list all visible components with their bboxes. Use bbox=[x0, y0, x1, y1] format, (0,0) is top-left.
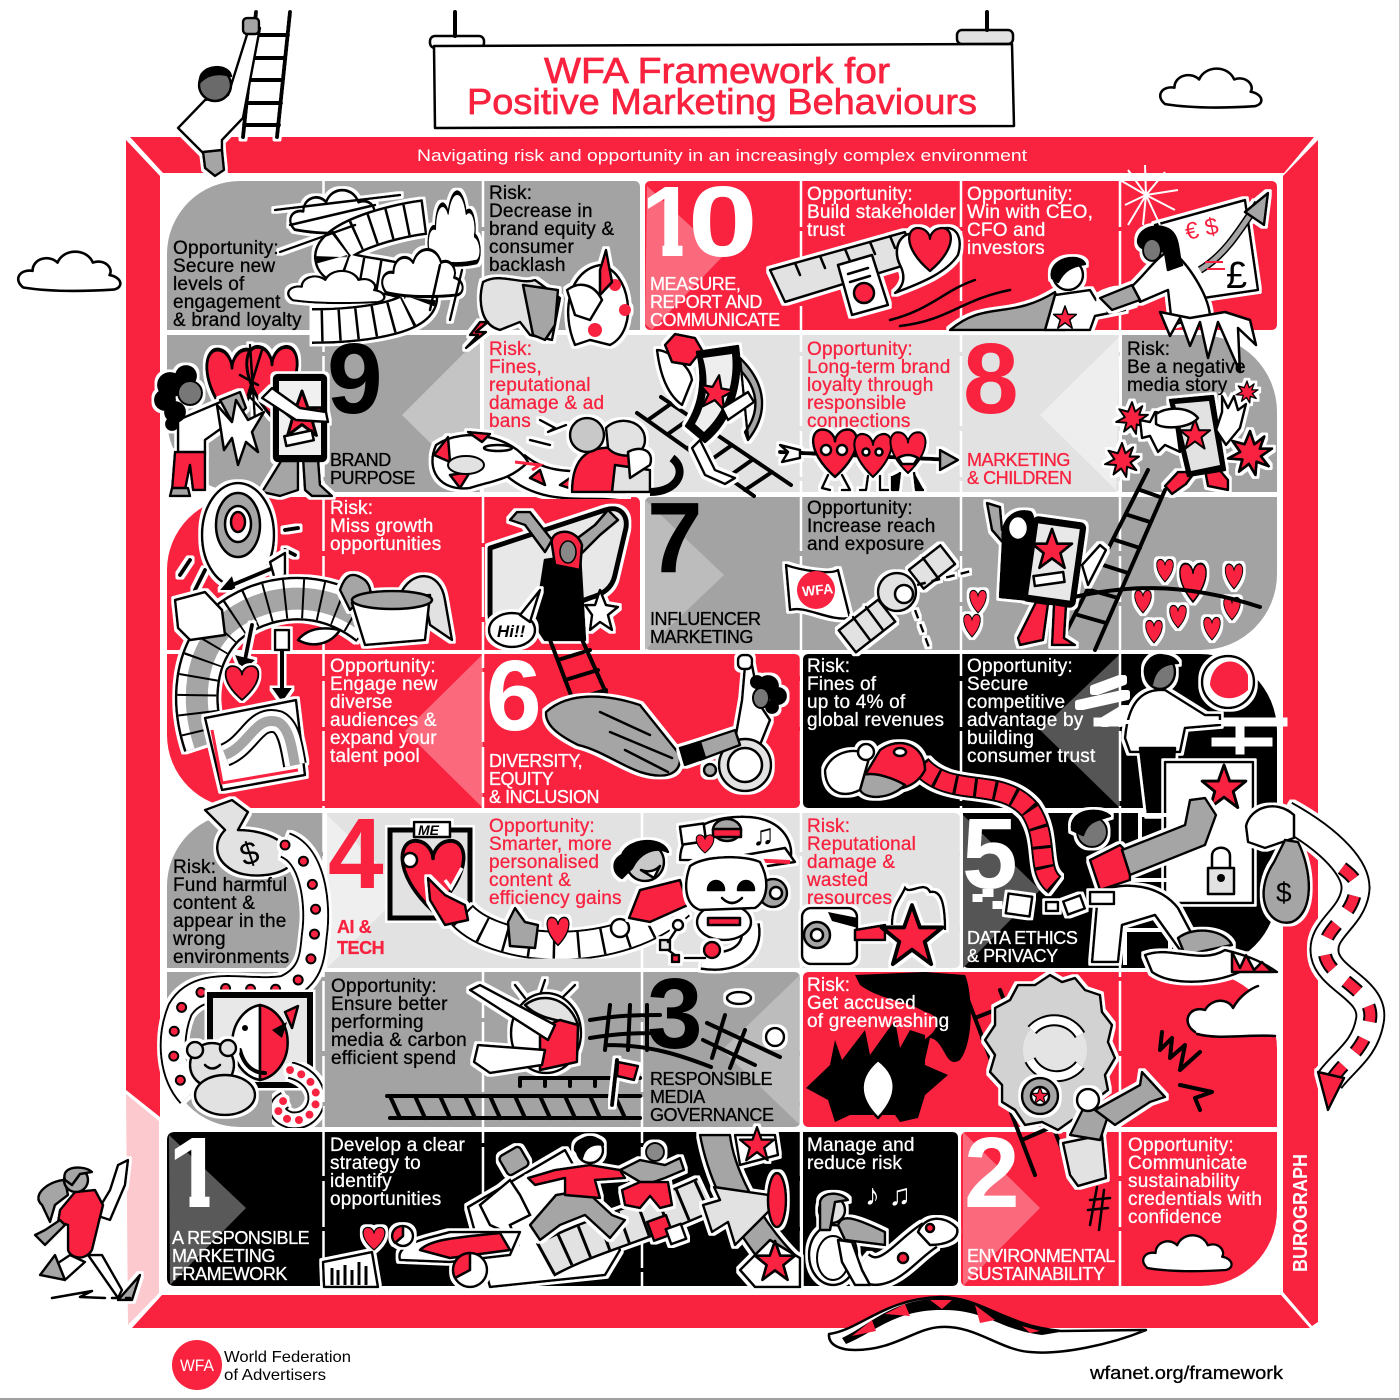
illustration: globe runner bbox=[470, 980, 581, 1073]
illustration: woman with finance chart bbox=[1100, 193, 1268, 325]
text block: Risk harmful content: appear in the bbox=[173, 911, 287, 932]
label: step 6: DIVERSITY, bbox=[489, 751, 582, 771]
text block: Risk fines revenues: Risk: bbox=[807, 656, 850, 677]
illustration: thought bubble with interests bbox=[680, 817, 795, 868]
logo: WFA: WFA bbox=[180, 1356, 215, 1375]
frame: red board border bbox=[126, 137, 1318, 1328]
url: wfanet.org/framework bbox=[1089, 1363, 1284, 1383]
icon: heart next to tube bbox=[226, 666, 258, 700]
text block: Opportunity brand loyalty: Opportunity: bbox=[173, 238, 279, 259]
logo: WFA bbox=[172, 1340, 351, 1390]
text block: Risk fines: Risk: bbox=[489, 339, 532, 360]
icon: finish flag bbox=[612, 1060, 638, 1105]
text block: Risk negative media: Be a negative bbox=[1127, 357, 1246, 378]
illustration: rocket board bbox=[468, 1145, 705, 1287]
illustration: arrow missing target bbox=[220, 553, 285, 590]
text block: Opportunity personalised content: Smarter, more bbox=[489, 834, 612, 855]
text block: Risk brand equity: Risk: bbox=[489, 183, 532, 204]
illustration: woman with finance chart: £ bbox=[1226, 255, 1247, 297]
text block: Risk negative media: media story bbox=[1127, 375, 1228, 396]
illustration: winding ladder road and clouds bbox=[275, 190, 480, 326]
panel: row 1 grey bbox=[167, 181, 640, 330]
panel: row 4 red bbox=[167, 654, 800, 808]
panel: row 6 red bbox=[803, 972, 1277, 1127]
icon: firework bbox=[1120, 165, 1178, 225]
text block: Opportunity media carbon: efficient spend bbox=[331, 1048, 456, 1069]
illustration: white burst under finance woman bbox=[1160, 312, 1256, 372]
text block: Risk brand equity: consumer bbox=[489, 237, 574, 258]
illustration: bottom snake bbox=[829, 1297, 1146, 1353]
text block: Opportunity brand loyalty: engagement bbox=[173, 292, 281, 313]
label: step 7: MARKETING bbox=[650, 627, 753, 647]
illustration: burst bbox=[217, 400, 264, 465]
label: step 2: ENVIRONMENTAL bbox=[967, 1246, 1115, 1266]
illustration: data icons bbox=[975, 892, 1114, 917]
text block: Opportunity diverse audiences: diverse bbox=[330, 692, 393, 713]
illustration: man at lectern with sun bbox=[1080, 655, 1285, 815]
text block: Opportunity long-term loyalty: Long-term brand bbox=[807, 357, 950, 378]
text block: Opportunity competitive advantage: consumer trust bbox=[967, 746, 1096, 767]
label: step 4: AI & bbox=[337, 917, 372, 937]
illustration: finish net bbox=[590, 1005, 780, 1068]
text block: Opportunity CEO: Win with CEO, bbox=[967, 202, 1093, 223]
icon: ground scribble bbox=[52, 1291, 130, 1298]
text block: Risk negative media: Risk: bbox=[1127, 339, 1170, 360]
label: step 2: SUSTAINABILITY bbox=[967, 1264, 1105, 1284]
illustration: thought bubble with interests: ♫ bbox=[752, 819, 774, 852]
text block: Opportunity long-term loyalty: connections bbox=[807, 411, 911, 432]
text block: Opportunity media carbon: Ensure better bbox=[331, 994, 448, 1015]
illustration: target bbox=[180, 483, 298, 590]
illustration: step ladder under man bbox=[1125, 815, 1178, 965]
text block: Risk fines: Fines, bbox=[489, 357, 542, 378]
label: step 5: DATA ETHICS bbox=[967, 928, 1078, 948]
illustration: award rosette bbox=[1022, 1078, 1058, 1114]
panel: row 5 grey bbox=[167, 813, 323, 968]
numerals: 1 bbox=[168, 1117, 224, 1229]
illustration: running track bbox=[387, 1078, 640, 1118]
panel: row 2 grey left bbox=[167, 335, 480, 492]
text block: Opportunity personalised content: personalised bbox=[489, 852, 599, 873]
illustration: ladder under cupid bbox=[637, 397, 791, 496]
text block: Opportunity stakeholder trust: trust bbox=[807, 220, 845, 241]
text block: Opportunity competitive advantage: Secure bbox=[967, 674, 1028, 695]
illustration: woman with broken heart bbox=[154, 365, 246, 496]
illustration: businessman with cape and handshake bbox=[950, 258, 1134, 330]
title banner bbox=[430, 12, 1014, 128]
illustration: line chart bbox=[205, 700, 305, 790]
text block: Manage risk: reduce risk bbox=[807, 1153, 902, 1174]
illustration: snake tail bbox=[650, 458, 680, 492]
illustration: leaf bbox=[298, 628, 340, 644]
panel: row 3 grey bbox=[645, 497, 1277, 650]
text block: Risk fines revenues: up to 4% of bbox=[807, 692, 906, 713]
banner rolls bbox=[430, 12, 1013, 48]
numerals: 6 bbox=[486, 640, 542, 752]
text block: Opportunity long-term loyalty: loyalty through bbox=[807, 375, 934, 396]
logo: WFA: of Advertisers bbox=[224, 1367, 326, 1384]
panel: row 2 grey right bbox=[1122, 335, 1277, 492]
text block: Opportunity reach: Increase reach bbox=[807, 516, 935, 537]
label: step 1: FRAMEWORK bbox=[172, 1264, 287, 1284]
text block: Risk growth: opportunities bbox=[330, 534, 441, 555]
text block: Opportunity competitive advantage: competitive bbox=[967, 692, 1065, 713]
illustration: white snake with money bag bbox=[1246, 806, 1370, 1110]
illustration: big arrow and stars bbox=[700, 1127, 800, 1287]
illustration: framed heart ME bbox=[390, 822, 470, 918]
text block: Opportunity media carbon: media & carbon bbox=[331, 1030, 467, 1051]
illustration: smiling woman bbox=[614, 841, 688, 922]
illustration: arrows into chart bbox=[235, 625, 292, 702]
panel: row 5 black bbox=[963, 813, 1277, 968]
subtitle: Navigating risk and opportunity in an increasingly complex environment bbox=[417, 146, 1027, 165]
numerals: 7 bbox=[647, 482, 703, 594]
icon: cloud top right bbox=[1160, 69, 1261, 108]
text block: Opportunity CEO: investors bbox=[967, 238, 1045, 259]
text block: Risk fines revenues: Fines of bbox=[807, 674, 877, 695]
illustration: leaf and flower bbox=[727, 992, 784, 1046]
text block: Opportunity CEO: CFO and bbox=[967, 220, 1046, 241]
numeral 10 bbox=[648, 186, 752, 257]
text block: Opportunity long-term loyalty: responsible bbox=[807, 393, 906, 414]
label: step 10: REPORT AND bbox=[650, 292, 762, 312]
numerals: 4 bbox=[328, 798, 384, 910]
text block: Risk fines: damage & ad bbox=[489, 393, 604, 414]
text block: Opportunity long-term loyalty: Opportunity: bbox=[807, 339, 913, 360]
panel: row 7 black bbox=[167, 1132, 800, 1286]
illustration: influencer with phone character bbox=[987, 503, 1106, 645]
numerals: 9 bbox=[327, 323, 383, 435]
text block: Opportunity stakeholder trust: Build stakeholder bbox=[807, 202, 957, 223]
illustration: woman in hijab and tablet bbox=[490, 509, 626, 640]
illustration: mother hugging child bbox=[530, 418, 651, 492]
illustration: WFA flag: WFA bbox=[801, 580, 834, 599]
title text: Positive Marketing Behaviours bbox=[467, 81, 977, 122]
illustration: ruler and report bbox=[770, 228, 960, 315]
label: step 4: TECH bbox=[337, 938, 384, 958]
numerals: 2 bbox=[964, 1117, 1020, 1229]
illustration: friendly robot bbox=[686, 857, 787, 961]
title text: WFA Framework for bbox=[544, 50, 890, 91]
panel: row 7 red bbox=[961, 1132, 1277, 1286]
label: step 8: & CHILDREN bbox=[967, 468, 1072, 488]
text block: Opportunity diverse audiences: Opportunity: bbox=[330, 656, 436, 677]
panel: row 7 black small bbox=[803, 1132, 958, 1286]
illustration: WFA flag bbox=[786, 565, 850, 619]
illustration: teddy bear bbox=[187, 1040, 255, 1115]
illustration: bar chart and icons bbox=[323, 1226, 413, 1287]
panel: row 2 light bbox=[484, 335, 1120, 492]
illustration: Hi speech bubble bbox=[489, 590, 540, 647]
illustration: person in pot with megaphone bbox=[1063, 1072, 1165, 1186]
text block: Risk harmful content: Fund harmful bbox=[173, 875, 287, 896]
text block: Opportunity sustainability credentials: sustainability bbox=[1128, 1171, 1240, 1192]
illustration: snake tail coil bbox=[278, 1070, 316, 1120]
illustration: Hi speech bubble: Hi!! bbox=[497, 622, 526, 641]
illustration: robot head with flames and star bbox=[802, 887, 945, 964]
illustration: cupid phone bbox=[657, 334, 762, 484]
illustration: money bag on grey panel bbox=[205, 800, 292, 876]
text block: Opportunity sustainability credentials: Opportunity: bbox=[1128, 1135, 1234, 1156]
text block: Risk harmful content: Risk: bbox=[173, 857, 216, 878]
text block: Opportunity sustainability credentials: Communicate bbox=[1128, 1153, 1247, 1174]
text block: Opportunity diverse audiences: Engage new bbox=[330, 674, 438, 695]
text block: Risk greenwashing: Risk: bbox=[807, 975, 850, 996]
label: step 10: MEASURE, bbox=[650, 274, 740, 294]
text block: Opportunity sustainability credentials: confidence bbox=[1128, 1207, 1222, 1228]
text block: Risk greenwashing: of greenwashing bbox=[807, 1011, 949, 1032]
illustration: phone hit by bad media bbox=[1105, 381, 1272, 494]
text block: Risk growth: Miss growth bbox=[330, 516, 434, 537]
text block: Risk growth: Risk: bbox=[330, 498, 373, 519]
text block: Opportunity competitive advantage: building bbox=[967, 728, 1034, 749]
cell divider dashes bbox=[167, 181, 1277, 1287]
text block: Opportunity brand loyalty: Secure new bbox=[173, 256, 275, 277]
illustration: star board with padlock bbox=[1165, 762, 1253, 903]
label: step 3: GOVERNANCE bbox=[650, 1105, 774, 1125]
illustration: heart family with arrow bbox=[780, 429, 958, 490]
illustration: wilted plant pot bbox=[340, 575, 452, 645]
illustration: recycling wreath bbox=[985, 975, 1115, 1130]
numeral 10: 1 bbox=[641, 166, 697, 278]
illustration: running woman outside board bbox=[35, 1160, 140, 1300]
text block: Risk harmful content: wrong bbox=[172, 929, 226, 950]
illustration: open grey hand bbox=[546, 696, 680, 776]
banner sign bbox=[434, 44, 1014, 128]
illustration: data nodes bbox=[660, 920, 720, 962]
icon: cloud left bbox=[18, 252, 120, 291]
text block: Risk harmful content: content & bbox=[173, 893, 255, 914]
illustration: red ladder bbox=[968, 990, 1068, 1175]
illustration: fighting hands and speech bubble bbox=[466, 250, 631, 348]
illustration: mirror with smiley and devil bbox=[210, 995, 310, 1085]
label: step 9: BRAND bbox=[330, 450, 391, 470]
text block: Risk brand equity: Decrease in bbox=[489, 201, 593, 222]
text block: Opportunity personalised content: Opportunity: bbox=[489, 816, 595, 837]
text block: Risk fines: bans bbox=[489, 411, 531, 432]
credit: Burograph: BUROGRAPH bbox=[1290, 1154, 1312, 1272]
numerals: 3 bbox=[647, 958, 703, 1070]
label: step 9: PURPOSE bbox=[330, 468, 415, 488]
illustration: broken hearts bbox=[207, 345, 297, 422]
illustration: ladder from tablet bbox=[550, 635, 625, 745]
text block: Opportunity competitive advantage: advantage by bbox=[967, 710, 1084, 731]
text block: Opportunity reach: and exposure bbox=[807, 534, 925, 555]
text block: Opportunity reach: Opportunity: bbox=[807, 498, 913, 519]
text block: Opportunity diverse audiences: expand your bbox=[330, 728, 437, 749]
numerals: 8 bbox=[963, 323, 1019, 435]
illustration: running team bbox=[528, 1137, 684, 1240]
text block: Risk brand equity: brand equity & bbox=[489, 219, 614, 240]
illustration: white snake with fangs bbox=[432, 432, 630, 490]
illustration: grey tube from hand to pot and chart bbox=[175, 592, 370, 745]
panel: row 3 red bbox=[167, 497, 640, 650]
label: step 1: A RESPONSIBLE bbox=[172, 1228, 310, 1248]
illustration: white snake with money bag: $ bbox=[1276, 877, 1292, 908]
illustration: flying hearts bbox=[964, 559, 1243, 643]
numerals bbox=[168, 166, 1020, 1229]
text block: Risk reputational damage: wasted bbox=[806, 870, 868, 891]
text block: Opportunity brand loyalty: levels of bbox=[173, 274, 245, 295]
label: step 10: COMMUNICATE bbox=[650, 310, 780, 330]
illustration: dotted black and white snake bbox=[173, 845, 316, 1095]
illustration: lightning marks bbox=[1160, 1032, 1212, 1110]
label: step 6: EQUITY bbox=[489, 769, 554, 789]
illustration: climbing man and ladder bbox=[178, 12, 290, 176]
label: step 3: RESPONSIBLE bbox=[650, 1069, 773, 1089]
illustration: woman riding friendly snake bbox=[809, 1194, 957, 1285]
board panels bbox=[167, 181, 1277, 1286]
illustration: hearts trajectory bbox=[1074, 588, 1260, 607]
illustration: phone character holding heart bbox=[262, 375, 332, 496]
text block: Opportunity CEO: Opportunity: bbox=[967, 184, 1073, 205]
label: step 1: MARKETING bbox=[172, 1246, 275, 1266]
text block: Risk brand equity: backlash bbox=[489, 255, 566, 276]
illustration: boy pushing back bbox=[1072, 798, 1232, 962]
illustration: money bag on grey panel: $ bbox=[235, 833, 263, 873]
text block: Opportunity sustainability credentials: credentials with bbox=[1128, 1189, 1262, 1210]
illustration: woman with finance chart: € $ bbox=[1183, 213, 1221, 246]
illustration: satellite bbox=[839, 545, 975, 652]
text block: Opportunity personalised content: content & bbox=[489, 870, 571, 891]
label: step 8: MARKETING bbox=[967, 450, 1070, 470]
panel: row 5 light bbox=[327, 813, 960, 968]
text block: Opportunity personalised content: efficiency gains bbox=[489, 888, 622, 909]
illustration: lean twin sticks bbox=[1088, 1187, 1110, 1230]
illustration: white cloud over corner bbox=[1188, 986, 1277, 1037]
illustration: pointing robot arm bbox=[428, 878, 680, 948]
text block: Risk greenwashing: Get accused bbox=[807, 993, 916, 1014]
text block: Opportunity stakeholder trust: Opportunity: bbox=[807, 184, 913, 205]
text block: Opportunity diverse audiences: talent pool bbox=[330, 746, 420, 767]
label: step 6: & INCLUSION bbox=[489, 787, 599, 807]
illustration: jaw of white snake under boy bbox=[1145, 950, 1277, 982]
text block: Risk fines revenues: global revenues bbox=[807, 710, 944, 731]
label: step 5: & PRIVACY bbox=[967, 946, 1058, 966]
icon: music notes: ♪ ♫ bbox=[865, 1179, 911, 1212]
numerals: 5 bbox=[962, 798, 1018, 910]
illustration: framed heart ME: ME bbox=[418, 822, 440, 838]
text block: Risk reputational damage: Reputational bbox=[807, 834, 916, 855]
number chevrons bbox=[169, 186, 1120, 1286]
illustration: long ladder bbox=[1062, 470, 1165, 650]
icon: white cloud in panel 2 bbox=[1143, 1235, 1232, 1271]
text block: Opportunity media carbon: performing bbox=[331, 1012, 424, 1033]
numeral 10: 0 bbox=[688, 166, 758, 277]
illustration: wave lines bbox=[890, 280, 1010, 326]
text block: Develop strategy: opportunities bbox=[330, 1189, 441, 1210]
text block: Risk reputational damage: damage & bbox=[807, 852, 895, 873]
panel: row 4 black bbox=[803, 654, 1277, 808]
text block: Develop strategy: Develop a clear bbox=[330, 1135, 465, 1156]
text block: Opportunity brand loyalty: & brand loyalty bbox=[173, 310, 302, 331]
text block: Develop strategy: identify bbox=[330, 1171, 392, 1192]
panel: row 6 grey bbox=[167, 972, 800, 1127]
text block: Risk reputational damage: Risk: bbox=[807, 816, 850, 837]
illustration: wheelchair athlete bbox=[680, 655, 787, 791]
label: step 3: MEDIA bbox=[650, 1087, 705, 1107]
text block: Risk harmful content: environments bbox=[173, 947, 289, 968]
logo: WFA: World Federation bbox=[224, 1349, 351, 1366]
text block: Risk reputational damage: resources bbox=[807, 888, 892, 909]
panel: row 1 red bbox=[645, 181, 1277, 330]
illustration: factory and smoke bbox=[806, 972, 971, 1122]
illustration: red fanged snake with money bbox=[825, 743, 1055, 885]
text block: Opportunity competitive advantage: Opportunity: bbox=[967, 656, 1073, 677]
illustration: rocket pencil bbox=[399, 1232, 520, 1287]
text block: Opportunity diverse audiences: audiences & bbox=[330, 710, 437, 731]
text block: Opportunity media carbon: Opportunity: bbox=[331, 976, 437, 997]
text block: Manage risk: Manage and bbox=[807, 1135, 915, 1156]
text block: Develop strategy: strategy to bbox=[330, 1153, 421, 1174]
label: step 7: INFLUENCER bbox=[650, 609, 761, 629]
text block: Risk fines: reputational bbox=[489, 375, 591, 396]
